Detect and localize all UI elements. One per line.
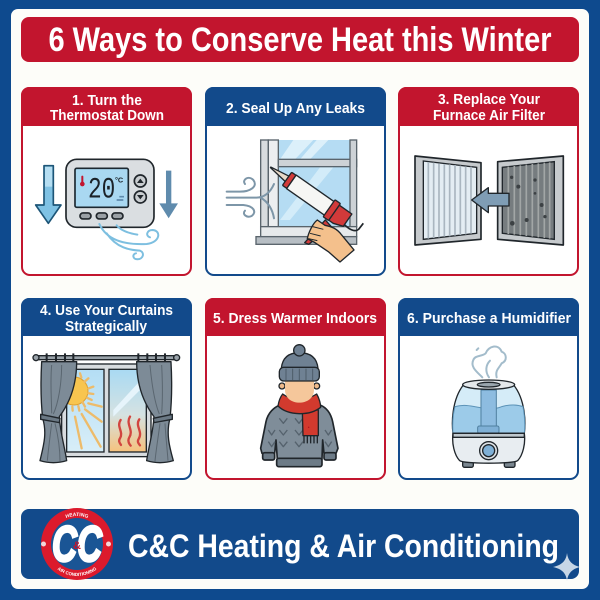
icon: thermostat [66, 159, 154, 227]
icon: humidifier [452, 380, 525, 467]
icon: curtain rod [33, 353, 180, 362]
icon: sparkle [553, 553, 580, 581]
panel: 2 seal leaks [205, 87, 386, 275]
footer banner: C&C Heating & Air Conditioning [128, 528, 559, 564]
logo: & [73, 540, 81, 552]
icon: sweater [261, 405, 338, 467]
heading 1: Thermostat Down [50, 107, 164, 124]
heading 6: 6. Purchase a Humidifier [407, 310, 571, 327]
icon: caulk gun [265, 159, 363, 244]
logo [41, 508, 113, 580]
icon: window [62, 364, 151, 457]
icon: heat waves [119, 417, 140, 446]
panel: 1 thermostat [21, 87, 192, 275]
heading 4: Strategically [65, 318, 148, 335]
heading 5: 5. Dress Warmer Indoors [213, 310, 377, 327]
icon: cold air swirls [99, 224, 158, 259]
panel: 5 dress warmer [205, 298, 386, 479]
icon: scarf [278, 394, 321, 443]
heading 1: 1. Turn the [72, 92, 142, 109]
icon: sun [60, 373, 102, 448]
icon: draft wind [227, 178, 274, 218]
logo: HEATING [65, 512, 88, 518]
icon: steam [472, 347, 506, 377]
icon: curtains [40, 362, 173, 463]
icon: thermostat: 20 [88, 173, 115, 207]
icon: hand [307, 220, 354, 262]
panel: 3 furnace filter [398, 87, 579, 275]
icon: clean filter [415, 156, 481, 245]
icon: thermostat: °C [115, 175, 124, 184]
icon: dirty filter [498, 156, 563, 245]
icon: replace arrow [472, 188, 509, 213]
icon: large down arrow [36, 166, 61, 223]
heading 1 [50, 92, 164, 124]
heading 3 [433, 91, 545, 124]
logo: AIR CONDITIONING [57, 567, 96, 576]
footer banner [21, 509, 579, 579]
icon: head and hat [279, 345, 320, 403]
heading 3: 3. Replace Your [438, 91, 540, 108]
icon: window frame [256, 140, 357, 244]
heading 4 [40, 302, 173, 335]
heading 4: 4. Use Your Curtains [40, 302, 173, 319]
icon: small down arrow [159, 171, 178, 218]
heading 3: Furnace Air Filter [433, 107, 545, 124]
logo: CC [52, 516, 103, 572]
panel: 4 curtains [21, 298, 192, 479]
heading 2: 2. Seal Up Any Leaks [226, 100, 365, 117]
panel: 6 humidifier [398, 298, 579, 479]
